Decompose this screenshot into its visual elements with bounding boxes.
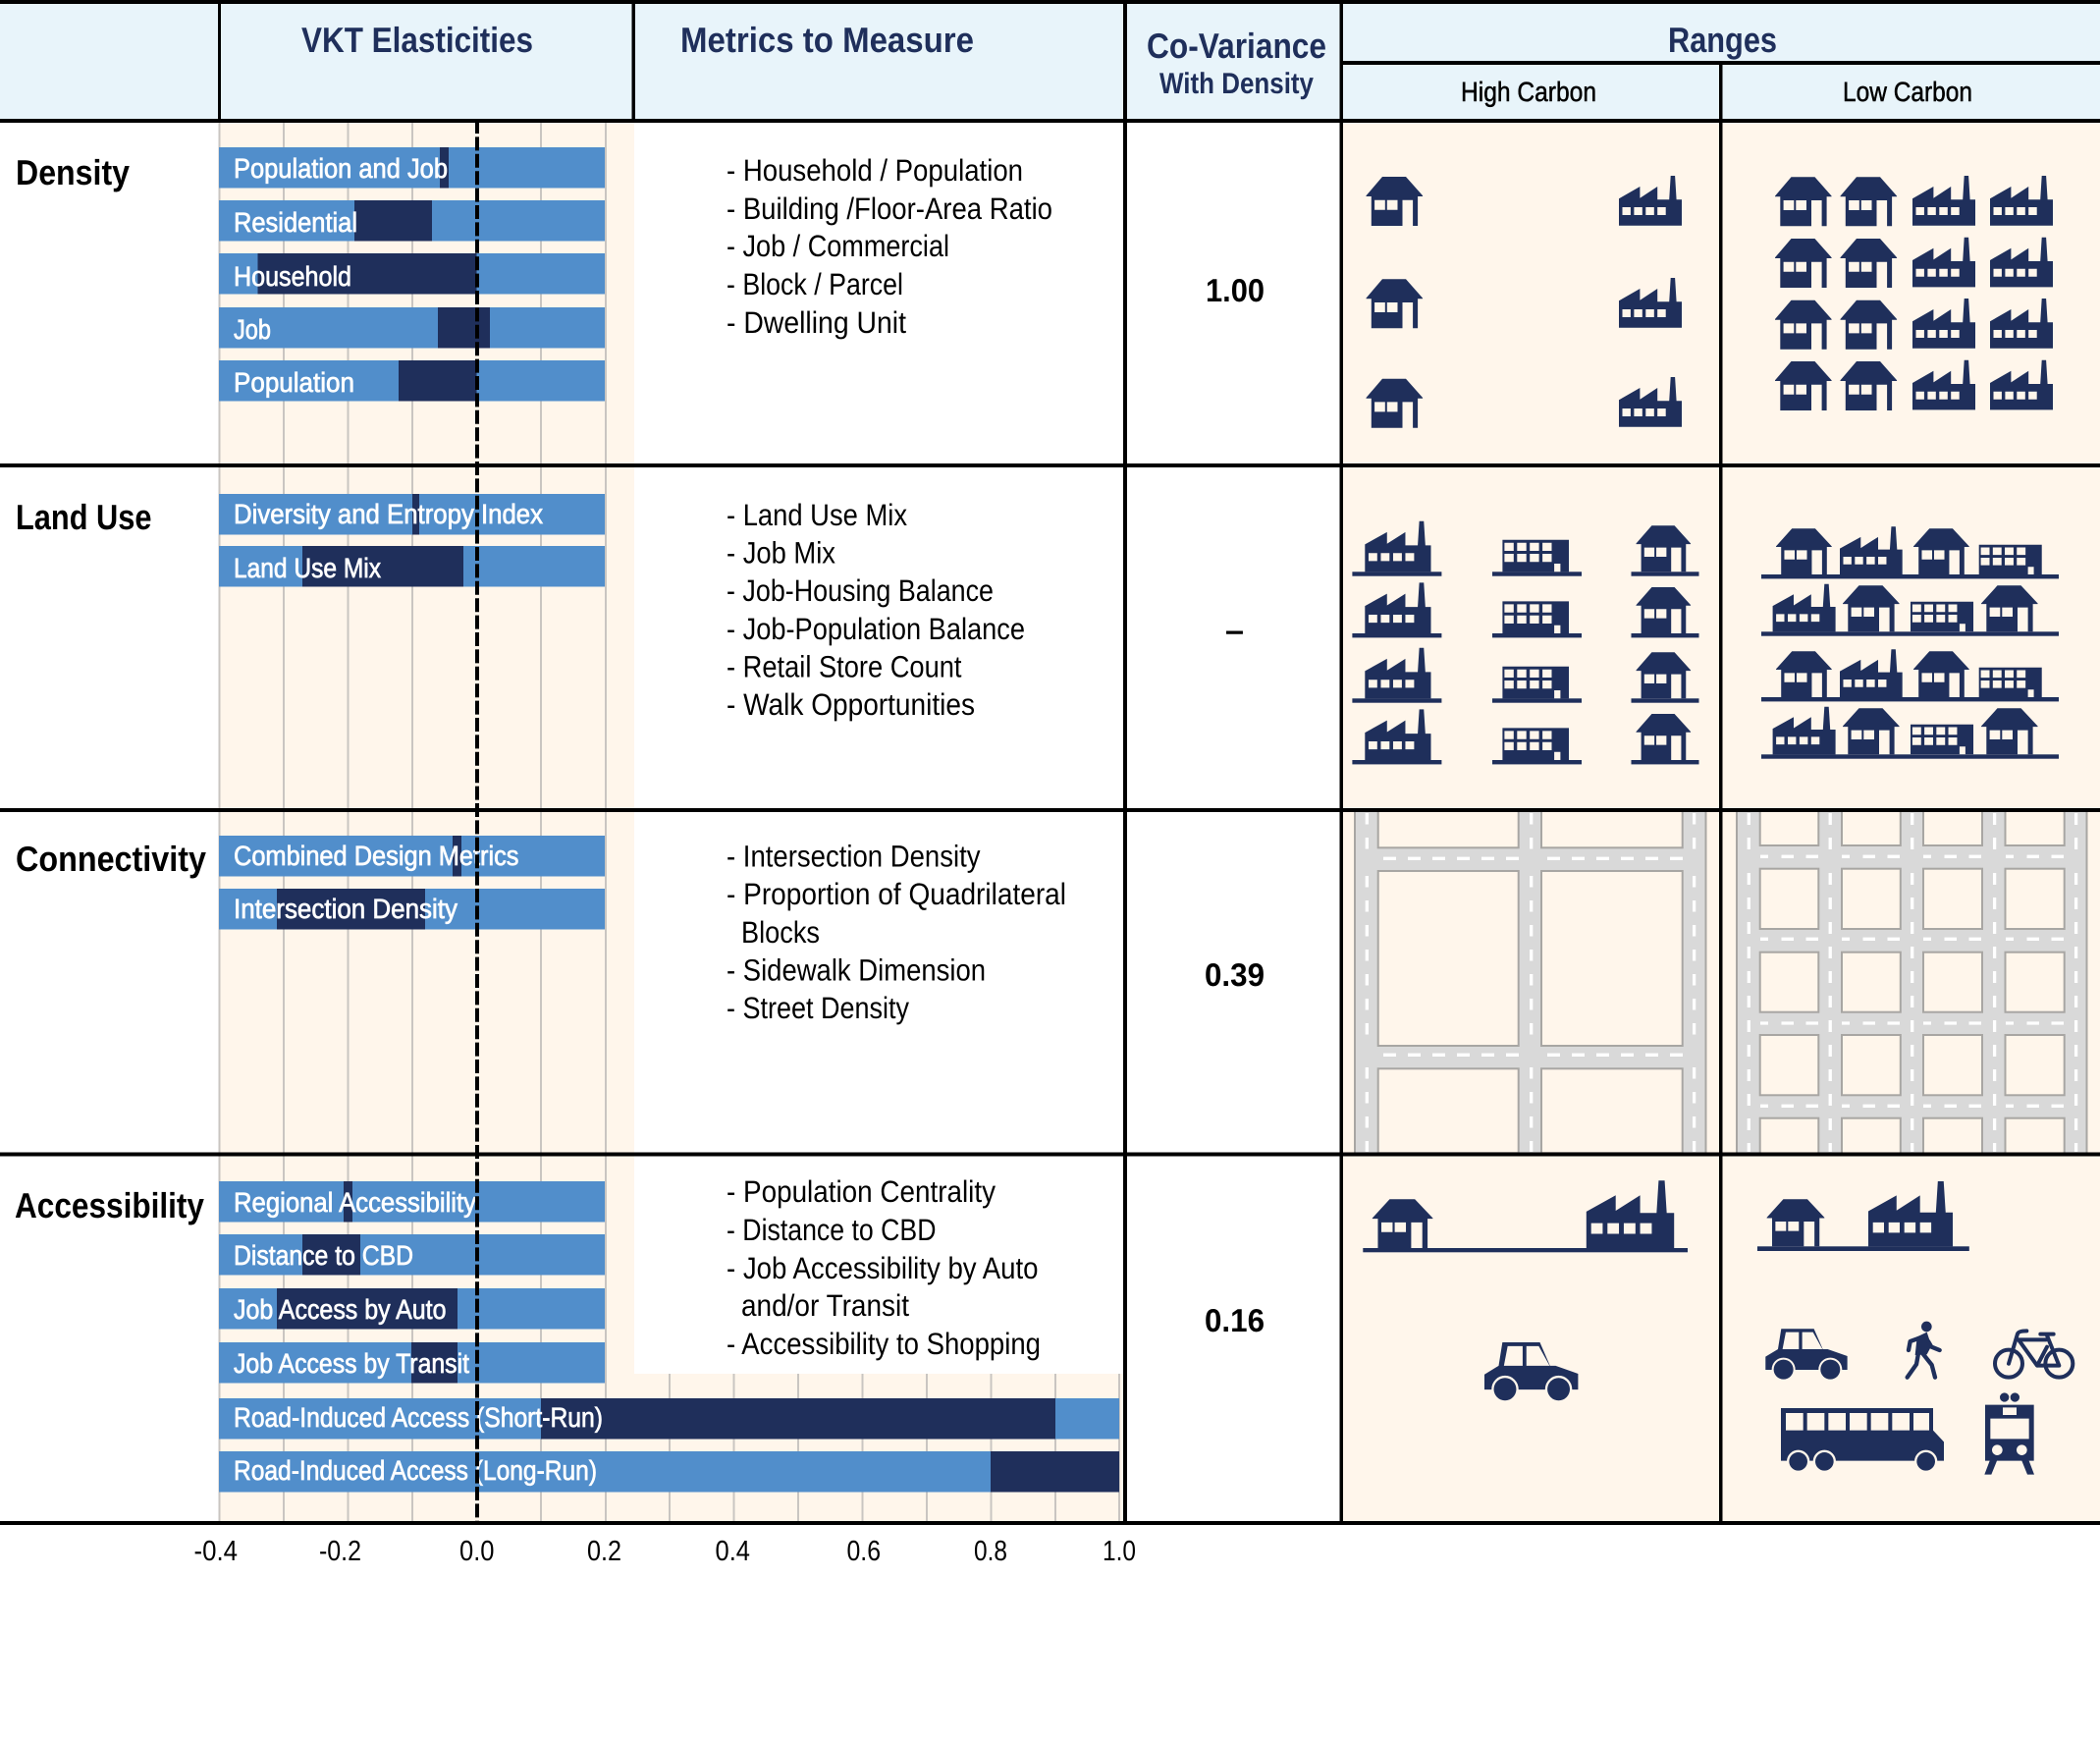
- chart: density bars: Population and Job: [234, 153, 448, 184]
- chart: accessibility bars: Job Access by Transit: [234, 1348, 469, 1379]
- metrics: land use: - Job-Population Balance: [727, 612, 1025, 646]
- chart: accessibility bars: Distance to CBD: [234, 1240, 413, 1271]
- icon: train: [1984, 1392, 2034, 1475]
- heading: Co-Variance: Co-Variance: [1147, 26, 1326, 66]
- icons: density, high carbon: [1367, 176, 1682, 428]
- chart: accessibility bars: Road-Induced Access (Long-Run): [234, 1455, 597, 1486]
- metrics: connectivity: - Intersection Density: [727, 839, 981, 874]
- icon: pedestrian: [1908, 1322, 1940, 1378]
- chart: accessibility bars: Regional Accessibility: [234, 1187, 476, 1218]
- chart: land use bars: Land Use Mix: [234, 553, 381, 583]
- road grid: low carbon connectivity: [1737, 810, 2087, 1154]
- metrics: land use: - Job-Housing Balance: [727, 573, 994, 608]
- row label: Density: Density: [16, 152, 130, 192]
- axis labels: -0.4: [194, 1536, 238, 1567]
- heading: Low Carbon: Low Carbon: [1843, 77, 1972, 107]
- metrics: land use: - Land Use Mix: [727, 498, 907, 532]
- metrics: connectivity: - Street Density: [727, 991, 909, 1025]
- row label: Connectivity: Connectivity: [16, 839, 206, 879]
- chart: land use bars: Diversity and Entropy Index: [234, 499, 543, 529]
- co-variance: connectivity: 0.39: [1205, 956, 1265, 993]
- metrics: connectivity: Blocks: [741, 915, 820, 950]
- metrics: accessibility: - Population Centrality: [727, 1174, 996, 1209]
- metrics: density: - Building /Floor-Area Ratio: [727, 191, 1052, 226]
- heading: Metrics to Measure: Metrics to Measure: [680, 20, 974, 60]
- metrics: land use: [727, 498, 1025, 722]
- axis labels: 0.0: [459, 1536, 495, 1567]
- axis labels: 0.2: [587, 1536, 621, 1567]
- chart: connectivity bars: Intersection Density: [234, 894, 458, 924]
- icons: land use, high carbon: [1352, 521, 1698, 764]
- icon: bicycle: [1995, 1331, 2073, 1378]
- icons: density, low carbon: [1775, 176, 2053, 410]
- metrics: density: - Household / Population: [727, 153, 1023, 188]
- metrics: density: [727, 153, 1052, 340]
- chart: density bars: [219, 147, 605, 401]
- metrics: accessibility: and/or Transit: [741, 1288, 909, 1323]
- heading: Ranges: Ranges: [1668, 20, 1777, 60]
- metrics: land use: - Walk Opportunities: [727, 687, 975, 722]
- metrics: density: - Dwelling Unit: [727, 305, 906, 340]
- co-variance: land use: –: [1225, 612, 1244, 648]
- metrics: accessibility: - Job Accessibility by Auto: [727, 1251, 1039, 1285]
- metrics: connectivity: - Proportion of Quadrilateral: [727, 877, 1066, 911]
- axis labels: 0.4: [715, 1536, 750, 1567]
- chart: connectivity bars: Combined Design Metrics: [234, 841, 518, 871]
- chart: density bars: Job: [234, 314, 271, 345]
- axis labels: 0.6: [846, 1536, 881, 1567]
- metrics: land use: - Job Mix: [727, 536, 835, 570]
- icon: bus: [1781, 1408, 1944, 1473]
- co-variance: accessibility: 0.16: [1205, 1302, 1265, 1338]
- metrics: connectivity: [727, 839, 1066, 1025]
- chart: density bars: Household: [234, 261, 351, 292]
- chart: accessibility bars: Job Access by Auto: [234, 1294, 446, 1325]
- metrics: accessibility: [727, 1174, 1041, 1361]
- metrics: accessibility: - Accessibility to Shopping: [727, 1327, 1041, 1361]
- icons: accessibility, high carbon land use: [1363, 1180, 1688, 1252]
- road grid: high carbon connectivity: [1355, 810, 1706, 1153]
- metrics: connectivity: - Sidewalk Dimension: [727, 952, 986, 988]
- metrics: accessibility: - Distance to CBD: [727, 1213, 937, 1247]
- header background: [0, 0, 2100, 121]
- row label: Accessibility: Accessibility: [15, 1185, 204, 1225]
- panel: chart background: [219, 123, 1123, 1521]
- axis labels: 1.0: [1103, 1536, 1136, 1567]
- panel: ranges background: [1342, 123, 2100, 1521]
- axis labels: [194, 1536, 1136, 1567]
- chart: connectivity bars: [219, 836, 605, 929]
- metrics: density: - Block / Parcel: [727, 267, 903, 301]
- heading: With Density: With Density: [1159, 68, 1314, 100]
- chart: density bars: Residential: [234, 207, 357, 238]
- zero reference line: [475, 120, 479, 1525]
- chart: density bars: Population: [234, 367, 354, 398]
- chart: accessibility bars: [219, 1181, 1119, 1493]
- icon: car, low carbon: [1765, 1329, 1848, 1382]
- chart: land use bars: [219, 494, 605, 587]
- metrics: land use: - Retail Store Count: [727, 650, 962, 683]
- chart: accessibility bars: Road-Induced Access (Short-Run): [234, 1402, 603, 1433]
- row label: Land Use: Land Use: [16, 497, 151, 537]
- heading: VKT Elasticities: VKT Elasticities: [301, 20, 533, 60]
- axis labels: -0.2: [319, 1536, 361, 1567]
- axis labels: 0.8: [974, 1536, 1007, 1567]
- icon: car, high carbon: [1484, 1342, 1578, 1403]
- metrics: density: - Job / Commercial: [727, 229, 949, 263]
- icons: land use, low carbon: [1761, 526, 2059, 759]
- co-variance: density: 1.00: [1206, 272, 1265, 308]
- chart gridlines: [220, 123, 1119, 1521]
- icons: accessibility, low carbon land use: [1757, 1181, 1969, 1251]
- heading: High Carbon: High Carbon: [1461, 77, 1596, 107]
